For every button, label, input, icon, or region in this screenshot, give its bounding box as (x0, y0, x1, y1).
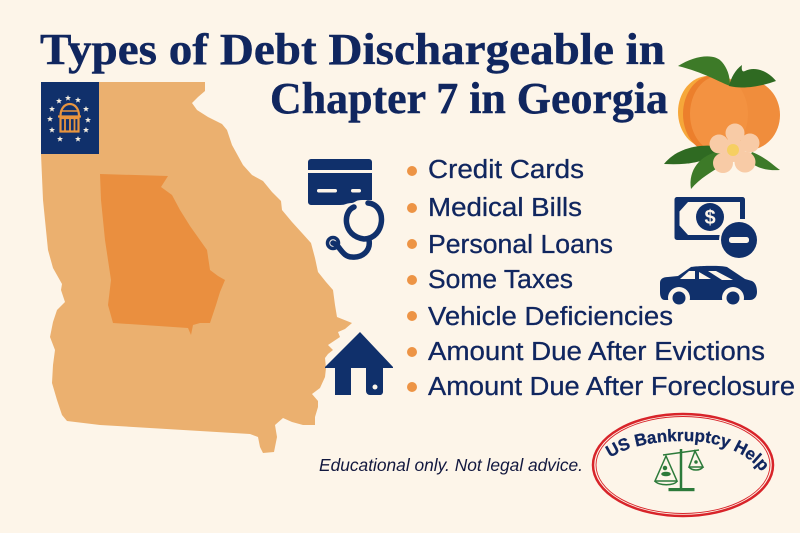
debt types list: Credit Cards (428, 156, 584, 184)
title: Types of Debt Dischargeable in (40, 25, 665, 74)
debt types list (407, 156, 795, 401)
debt types list: Amount Due After Foreclosure (428, 373, 795, 401)
icon: money with minus (677, 200, 759, 260)
debt types list: Personal Loans (428, 231, 613, 259)
title: Chapter 7 in Georgia (270, 74, 668, 123)
logo: US Bankruptcy Help: US Bankruptcy Help (605, 428, 767, 470)
icon: Georgia flag canton (41, 82, 99, 154)
icon: house (325, 332, 393, 395)
top leaves (678, 56, 730, 86)
capitol arch (58, 104, 81, 132)
icon: credit card (308, 159, 372, 205)
logo: US Bankruptcy Help (592, 412, 774, 518)
state map: Georgia large outline (41, 82, 352, 453)
icon: stethoscope (328, 203, 381, 257)
blossom (710, 124, 760, 173)
lower leaves (664, 146, 718, 164)
icon: car (660, 266, 757, 309)
debt types list: Amount Due After Evictions (428, 338, 765, 366)
list bullets (407, 166, 417, 392)
icon: money with minus: $ (704, 207, 716, 229)
peach body (678, 76, 738, 148)
disclaimer note: Educational only. Not legal advice. (319, 455, 583, 475)
icon: peach with leaves and blossom (664, 56, 780, 189)
debt types list: Medical Bills (428, 194, 582, 222)
debt types list: Some Taxes (428, 266, 573, 294)
scales of justice (655, 449, 703, 491)
state map: inner Georgia highlight (100, 174, 225, 335)
title (40, 25, 668, 123)
debt types list: Vehicle Deficiencies (428, 303, 673, 331)
flag stars (47, 95, 91, 142)
